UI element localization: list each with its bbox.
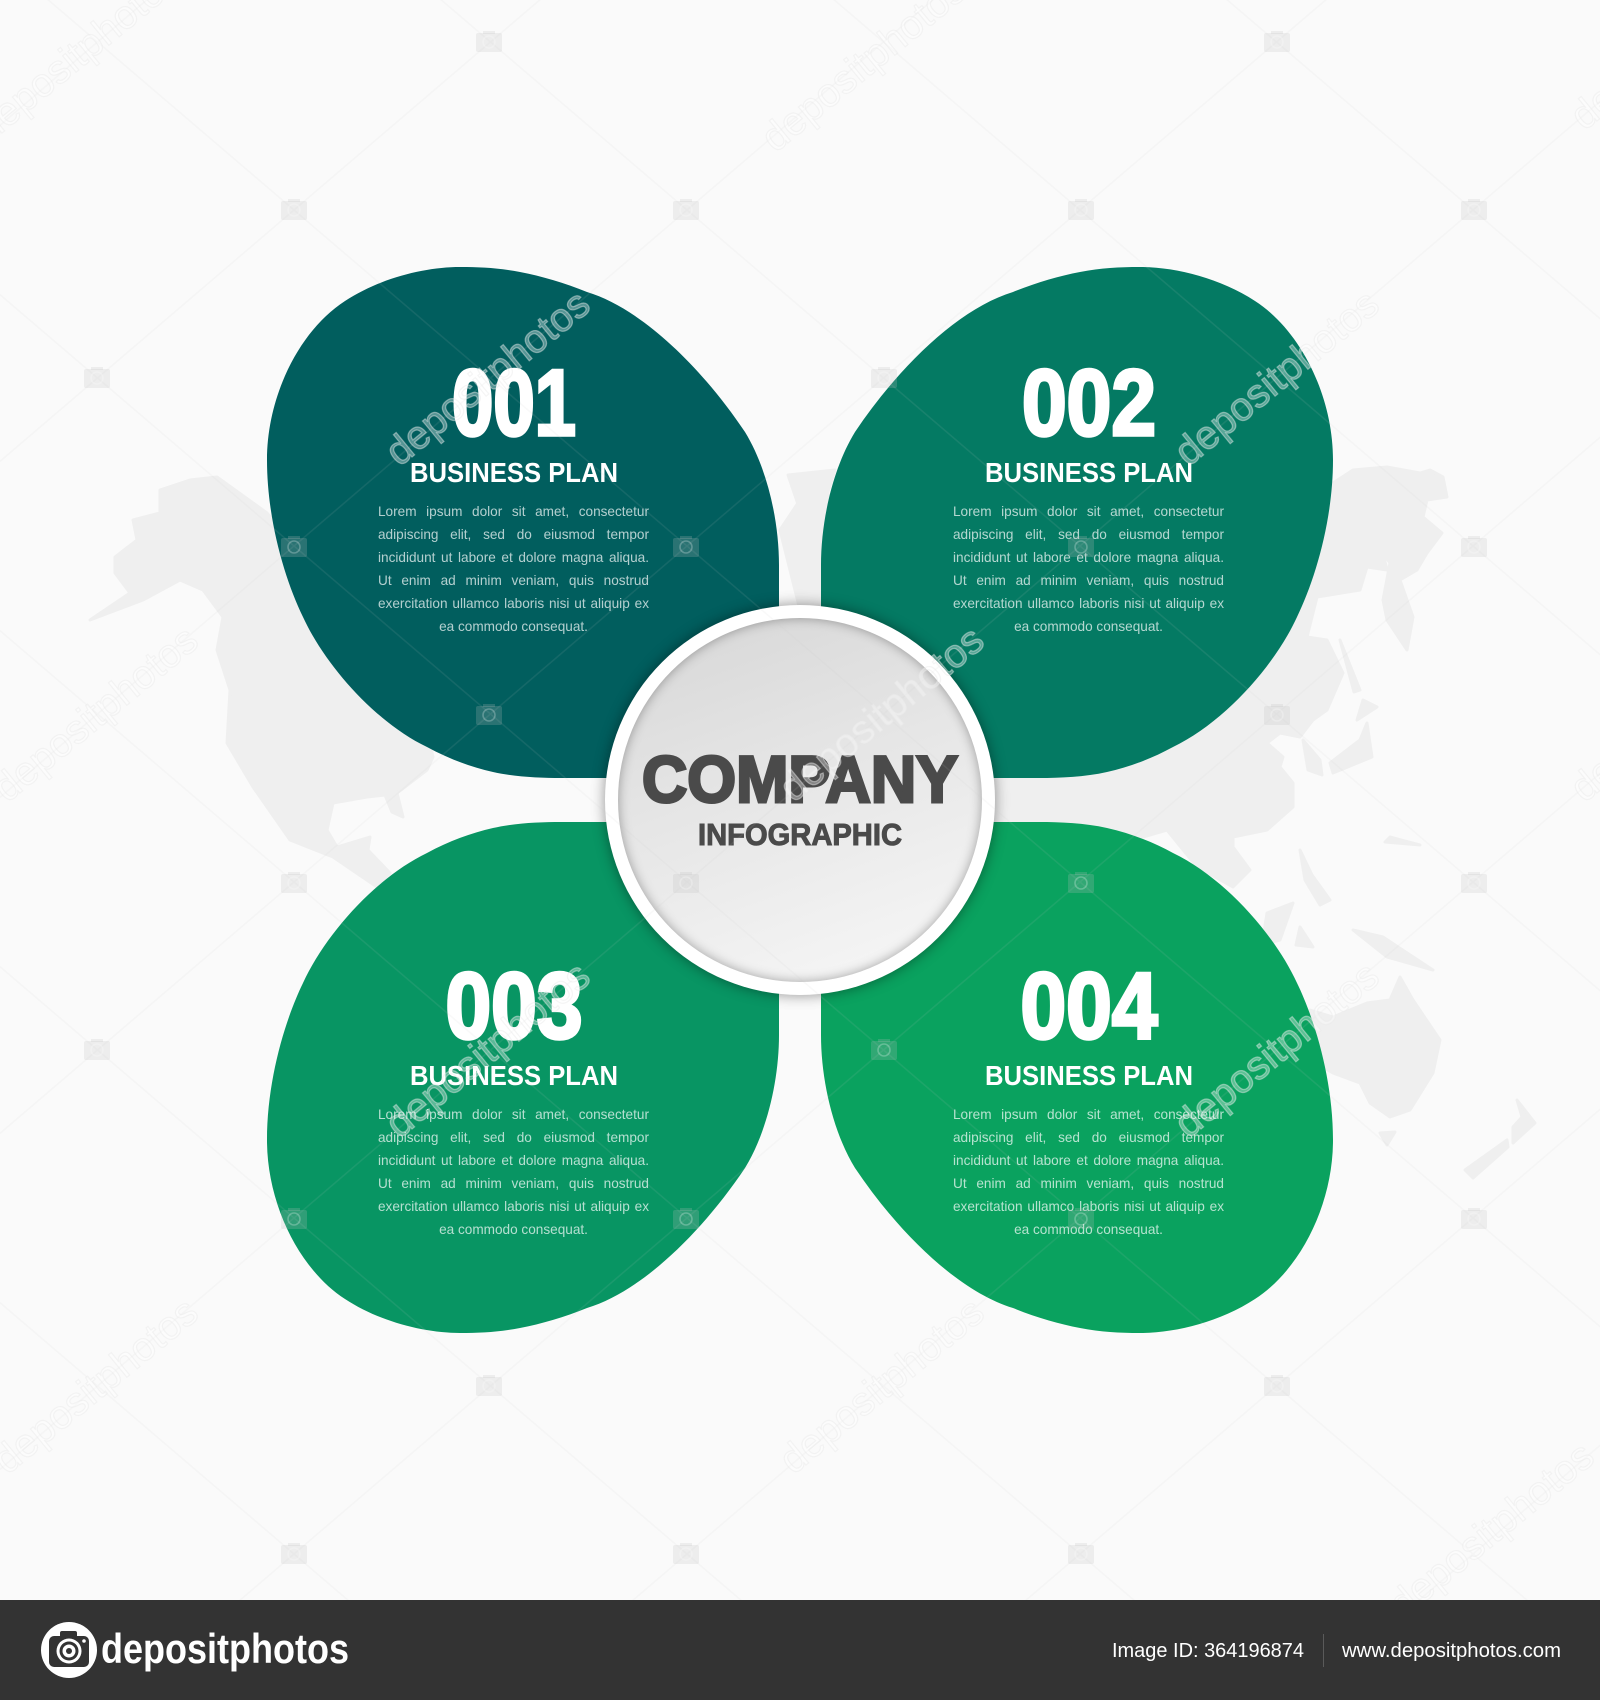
watermark text: depositphotos [377,954,598,1146]
body text: ea commodo consequat. [1014,1222,1163,1237]
body text: Ut enim ad minim veniam, quis nostrud [953,1176,1224,1191]
petal 3 [267,822,779,1333]
number 001: 001 [452,350,576,455]
text block 004 [953,953,1224,1237]
body text [378,504,649,634]
heading: BUSINESS PLAN [985,1060,1193,1091]
body text: ea commodo consequat. [439,619,588,634]
body text: Lorem ipsum dolor sit amet, consectetur [953,1107,1224,1122]
heading: BUSINESS PLAN [985,457,1193,488]
body text: Lorem ipsum dolor sit amet, consectetur [953,504,1224,519]
body text: incididunt ut labore et dolore magna aliqua. [953,550,1224,565]
body text: adipiscing elit, sed do eiusmod tempor [953,1130,1224,1145]
subtitle: infographic: INFOGRAPHIC [698,817,902,852]
watermark text: depositphotos [1381,1434,1600,1626]
title: company: COMPANY [642,742,958,816]
body text: adipiscing elit, sed do eiusmod tempor [378,1130,649,1145]
petal 1 [267,267,779,778]
image id: Image ID: 364196874 [1112,1640,1304,1662]
watermark text: depositphotos [1166,282,1387,474]
watermark text: depositphotos [771,1290,992,1482]
body text: exercitation ullamco laboris nisi ut aliquip ex [378,596,649,611]
number 004: 004 [1020,953,1158,1058]
body text: Lorem ipsum dolor sit amet, consectetur [378,504,649,519]
text block 002 [953,350,1224,634]
body text: incididunt ut labore et dolore magna aliqua. [953,1153,1224,1168]
number 003: 003 [446,953,582,1058]
body text: adipiscing elit, sed do eiusmod tempor [953,527,1224,542]
body text: Lorem ipsum dolor sit amet, consectetur [378,1107,649,1122]
watermark camera icons [84,31,1487,1564]
body text: exercitation ullamco laboris nisi ut aliquip ex [953,596,1224,611]
body text: ea commodo consequat. [439,1222,588,1237]
logo wordmark: depositphotos [101,1625,349,1672]
body text [953,504,1224,634]
petal 4 [821,822,1333,1333]
body text: Ut enim ad minim veniam, quis nostrud [378,1176,649,1191]
center circle [605,605,995,995]
number 002: 002 [1022,350,1156,455]
body text: ea commodo consequat. [1014,619,1163,634]
body text: exercitation ullamco laboris nisi ut aliquip ex [953,1199,1224,1214]
body text: adipiscing elit, sed do eiusmod tempor [378,527,649,542]
petal 2 [821,267,1333,778]
footer bar [0,1600,1600,1700]
body text: exercitation ullamco laboris nisi ut aliquip ex [378,1199,649,1214]
body text: Ut enim ad minim veniam, quis nostrud [953,573,1224,588]
body text [378,1107,649,1237]
body text: incididunt ut labore et dolore magna aliqua. [378,1153,649,1168]
body text [953,1107,1224,1237]
body text: Ut enim ad minim veniam, quis nostrud [378,573,649,588]
watermark text: depositphotos [377,282,598,474]
website: www.depositphotos.com [1341,1640,1561,1662]
body text: incididunt ut labore et dolore magna aliqua. [378,550,649,565]
icon: camera logo [41,1622,97,1678]
watermark text: depositphotos [771,618,992,810]
text block 001 [378,350,649,634]
text block 003 [378,953,649,1237]
world map [90,450,1535,1178]
watermark text: depositphotos [1166,954,1387,1146]
heading: BUSINESS PLAN [410,1060,618,1091]
heading: BUSINESS PLAN [410,457,618,488]
